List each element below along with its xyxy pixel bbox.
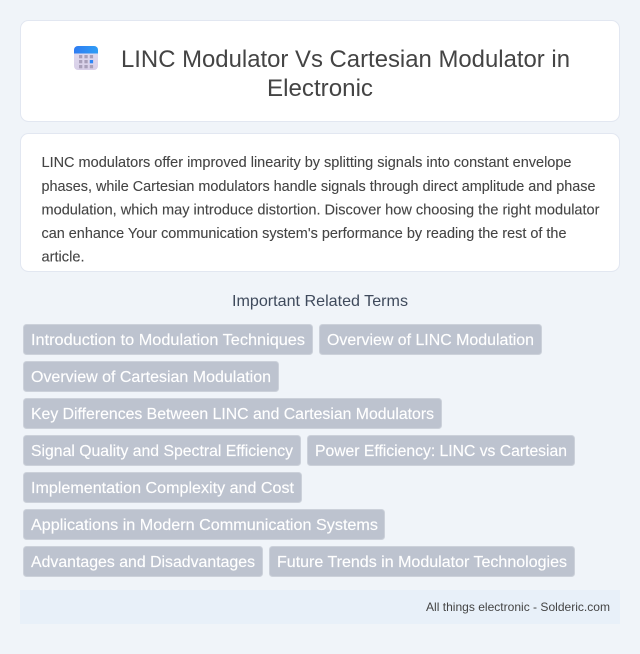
tag: Cartesian overview: Overview of Cartesian Modulation (31, 369, 271, 386)
tag: introduction: Introduction to Modulation Techniques (31, 332, 305, 349)
tag: Cartesian overview (24, 362, 278, 392)
footer (20, 590, 620, 624)
tag: implementation (24, 472, 302, 502)
panel: description (20, 134, 620, 272)
tag: LINC overview (320, 324, 542, 354)
text block: description: LINC modulators offer improved linearity by splitting signals into constant envelope (42, 155, 572, 171)
tag: applications: Applications in Modern Communication Systems (31, 517, 378, 534)
tag: advantages: Advantages and Disadvantages (31, 554, 255, 571)
text block: description: phases, while Cartesian modulators handle signals through direct amplitude and phase (42, 179, 596, 195)
panel: title card (20, 20, 620, 122)
text block: description: modulation, which may introduce distortion. Discover how choosing the right modulator (42, 202, 600, 218)
tag: future trends (270, 546, 574, 576)
heading: important related terms: Important Related Terms (232, 293, 408, 310)
tag: key differences (24, 398, 442, 428)
icon: calendar (74, 46, 98, 70)
tag: LINC overview: Overview of LINC Modulation (327, 332, 534, 349)
tag: future trends: Future Trends in Modulator Technologies (277, 554, 567, 571)
tag: applications (24, 510, 384, 540)
tag: implementation: Implementation Complexity and Cost (31, 480, 295, 497)
tag: advantages (24, 546, 262, 576)
tag list (24, 324, 574, 576)
text block: description: can enhance Your communication system's performance by reading the rest of the (42, 226, 566, 242)
tag: power efficiency: Power Efficiency: LINC vs Cartesian (315, 443, 567, 460)
title: LINC Modulator Vs Cartesian Modulator in (121, 46, 570, 73)
footer: All things electronic - Solderic.com (426, 600, 610, 614)
tag: key differences: Key Differences Between LINC and Cartesian Modulators (31, 406, 434, 423)
text block: description: article. (42, 250, 84, 266)
tag: power efficiency (308, 436, 574, 466)
text block: description (42, 155, 600, 266)
title (121, 46, 570, 102)
tag: introduction (24, 324, 312, 354)
title: Electronic (267, 75, 373, 102)
tag: signal quality (24, 436, 300, 466)
tag: signal quality: Signal Quality and Spectral Efficiency (31, 443, 293, 460)
